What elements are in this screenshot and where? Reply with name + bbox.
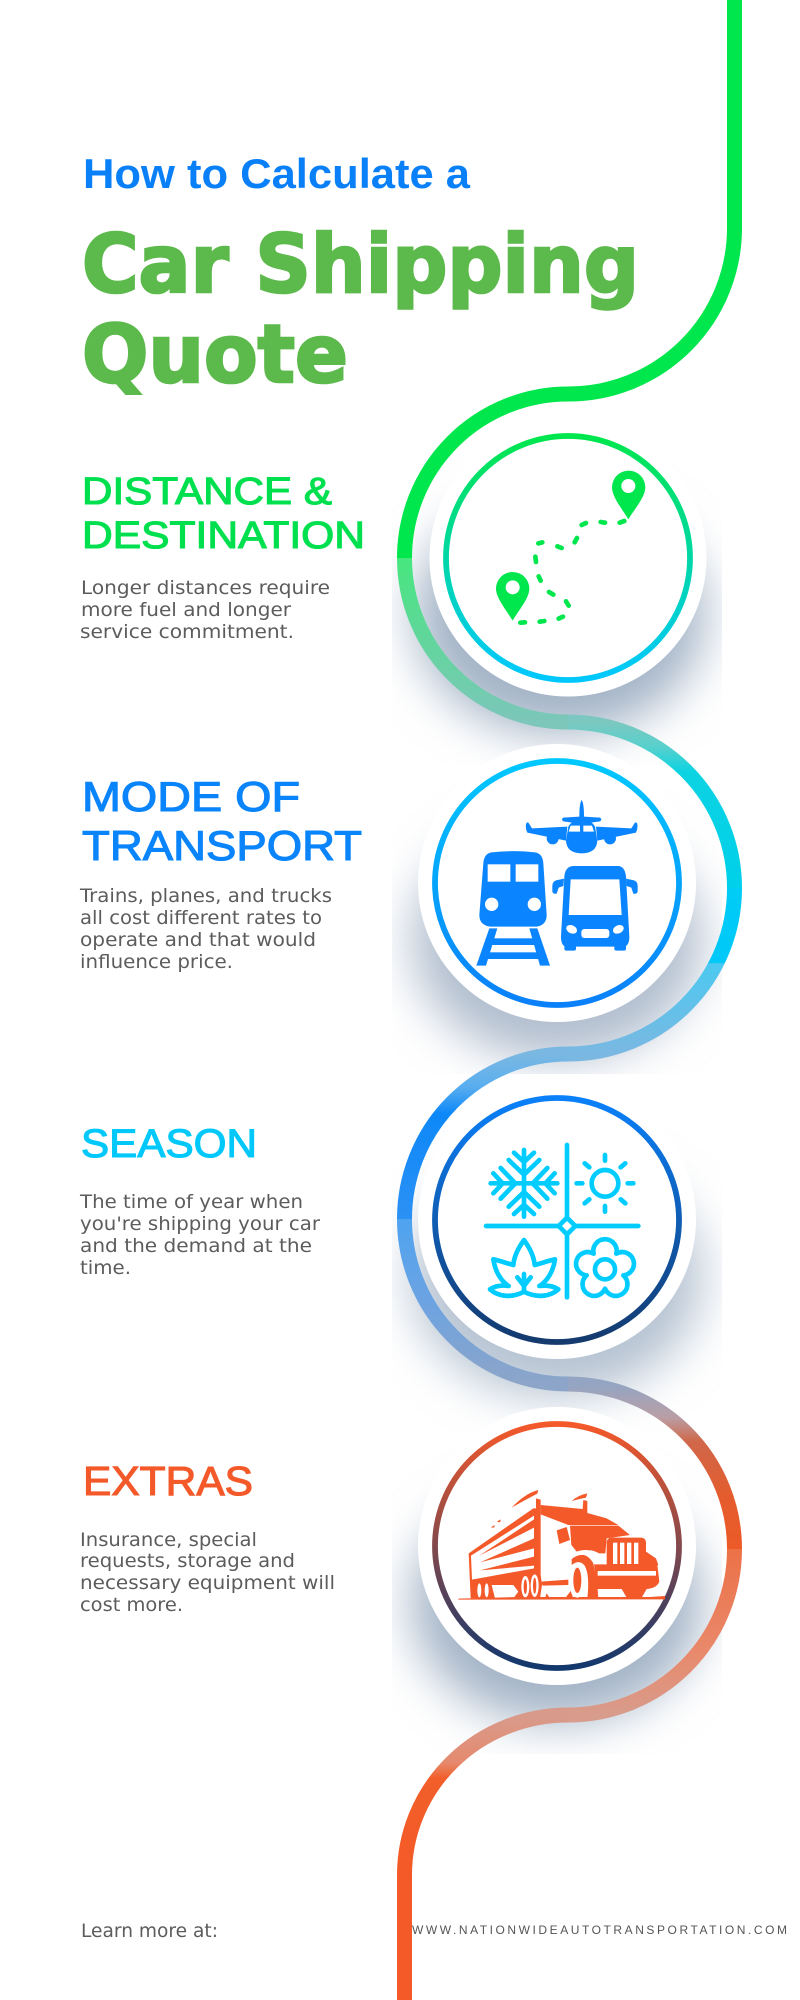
main title line 1: Car Shipping <box>82 218 639 311</box>
grille and bumper <box>594 1538 659 1598</box>
main title line 2: Quote <box>82 308 348 401</box>
description: and the demand at the <box>80 1236 312 1257</box>
description: you're shipping your car <box>80 1214 320 1235</box>
description: service commitment. <box>80 622 294 643</box>
icon disc: four seasons <box>418 1081 696 1359</box>
trailer <box>469 1490 542 1598</box>
panel: season text <box>79 1122 320 1279</box>
icon: four seasons grid <box>486 1145 638 1297</box>
snowflake <box>491 1150 557 1217</box>
description: influence price. <box>80 952 233 973</box>
winding gradient road line <box>404 0 734 2000</box>
description: necessary equipment will <box>80 1573 335 1594</box>
heading <box>82 471 365 557</box>
subtitle: How to Calculate a <box>83 150 471 197</box>
icon: semi truck <box>458 1490 665 1600</box>
heading: DESTINATION <box>82 515 365 557</box>
sun <box>577 1155 633 1212</box>
icon: plane, train and bus <box>476 800 638 966</box>
description: time. <box>80 1258 131 1279</box>
icon: route with two map pins <box>496 471 645 623</box>
title block <box>82 150 639 401</box>
heading: SEASON <box>81 1122 257 1166</box>
description: cost more. <box>80 1595 183 1616</box>
panel: extras text <box>80 1458 335 1616</box>
heading <box>82 773 362 869</box>
heading: EXTRAS <box>83 1458 253 1504</box>
panel: distance and destination text <box>80 471 365 643</box>
leaf <box>490 1240 558 1296</box>
heading: MODE OF <box>82 773 300 820</box>
description: Longer distances require <box>81 578 330 599</box>
description: Trains, planes, and trucks <box>79 886 332 907</box>
description: more fuel and longer <box>81 600 291 621</box>
description: The time of year when <box>79 1192 303 1213</box>
flower <box>576 1239 634 1296</box>
panel: mode of transport text <box>79 773 362 973</box>
train <box>476 851 550 966</box>
heading: TRANSPORT <box>82 822 362 869</box>
cab <box>541 1493 630 1598</box>
description <box>80 578 330 643</box>
icon disc: map route <box>430 420 706 696</box>
footer: website url: WWW.NATIONWIDEAUTOTRANSPORTATION.COM <box>412 1923 787 1937</box>
front wheel and fender <box>569 1550 604 1598</box>
drop shadows behind the icon discs <box>412 495 705 1723</box>
description: requests, storage and <box>80 1551 295 1572</box>
icon disc: transport modes <box>418 744 696 1022</box>
footer: learn more label: Learn more at: <box>81 1921 218 1942</box>
icon disc: truck <box>418 1407 696 1685</box>
heading: DISTANCE & <box>82 471 332 513</box>
plane <box>526 800 637 853</box>
description <box>80 1530 335 1616</box>
description <box>79 1192 320 1279</box>
description: all cost different rates to <box>80 908 322 929</box>
ground line <box>458 1596 665 1600</box>
description <box>79 886 332 973</box>
description: Insurance, special <box>80 1530 257 1551</box>
description: operate and that would <box>80 930 316 951</box>
bus <box>552 866 638 951</box>
